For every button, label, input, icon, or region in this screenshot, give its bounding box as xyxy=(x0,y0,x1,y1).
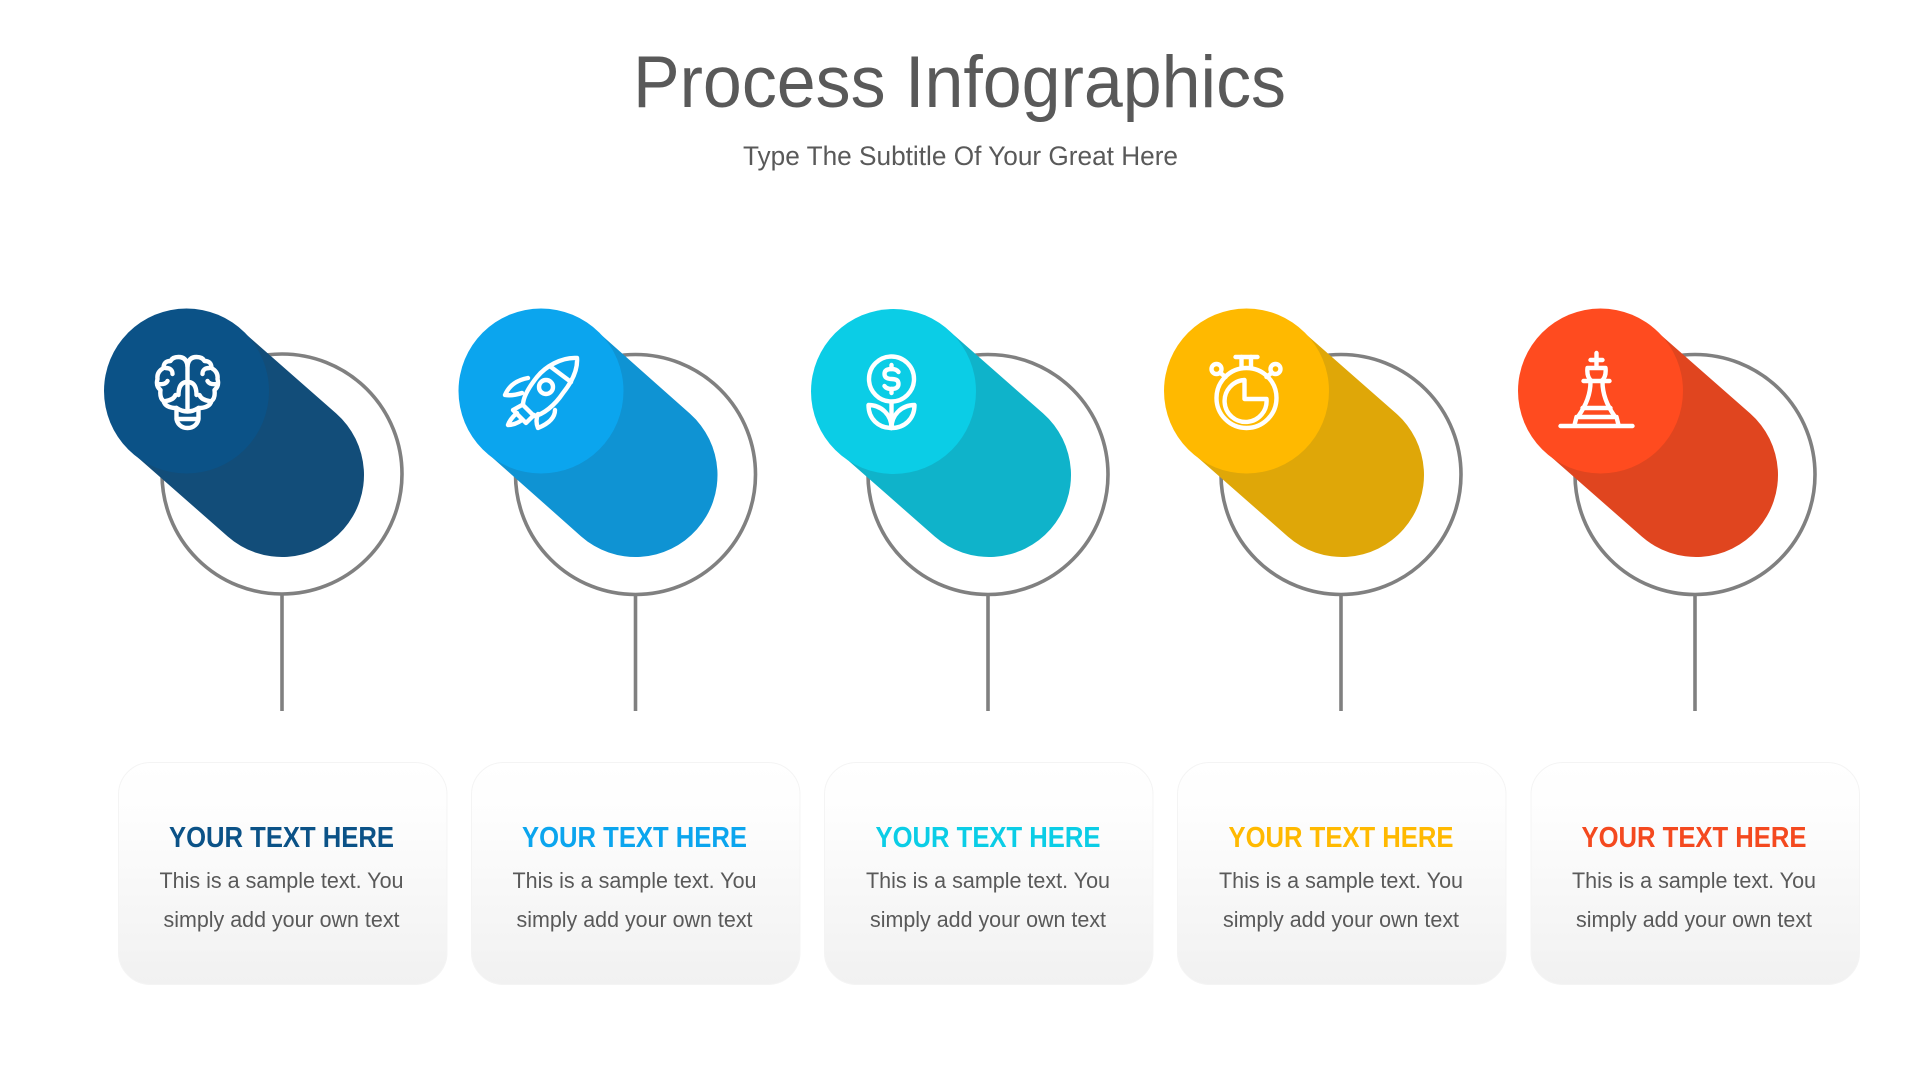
step 4: stopwatch xyxy=(1164,308,1461,711)
card 3 xyxy=(824,762,1153,984)
card 3 text: simply add your own text xyxy=(870,907,1106,932)
card 4 text: This is a sample text. You xyxy=(1219,868,1463,893)
title: Process Infographics xyxy=(633,42,1286,123)
card 1 text: This is a sample text. You xyxy=(160,868,404,893)
card 1 text: simply add your own text xyxy=(164,907,400,932)
icon: money flower xyxy=(868,356,914,428)
front circle 4 xyxy=(1164,308,1329,474)
card 2 heading: YOUR TEXT HERE xyxy=(522,822,747,854)
step 5: chess king xyxy=(1518,308,1815,711)
capsule 1 xyxy=(188,392,282,475)
step 2: rocket xyxy=(458,308,756,711)
card 4 text: simply add your own text xyxy=(1223,907,1459,932)
card 3 heading: YOUR TEXT HERE xyxy=(876,822,1100,854)
step 1: brain xyxy=(104,308,402,711)
ring and stem 1 xyxy=(162,354,402,711)
card 2 xyxy=(472,762,800,984)
capsule 4 xyxy=(1248,392,1342,475)
front circle 1 xyxy=(104,308,269,474)
subtitle: Type The Subtitle Of Your Great Here xyxy=(743,141,1178,171)
icon: rocket xyxy=(505,358,577,428)
capsule 5 xyxy=(1602,392,1696,475)
capsule 2 xyxy=(542,392,636,475)
card 2 text: This is a sample text. You xyxy=(512,868,756,893)
card 1 heading: YOUR TEXT HERE xyxy=(169,822,394,854)
card 4 xyxy=(1178,762,1506,984)
ring and stem 3 xyxy=(868,354,1108,711)
front circle 5 xyxy=(1518,308,1683,474)
step 3: money flower xyxy=(811,309,1108,711)
icon: stopwatch xyxy=(1212,357,1280,428)
icon: chess king xyxy=(1560,353,1632,426)
capsule 3 xyxy=(894,392,989,475)
card 1 xyxy=(118,762,447,984)
ring and stem 4 xyxy=(1221,354,1461,711)
card 5 xyxy=(1531,762,1860,984)
front circle 3 xyxy=(811,309,976,474)
card 5 text: simply add your own text xyxy=(1576,907,1812,932)
card 5 heading: YOUR TEXT HERE xyxy=(1582,822,1806,854)
card 3 text: This is a sample text. You xyxy=(866,868,1110,893)
ring and stem 5 xyxy=(1575,354,1815,711)
card 2 text: simply add your own text xyxy=(516,907,752,932)
icon: brain bulb xyxy=(157,357,218,428)
ring and stem 2 xyxy=(516,354,756,711)
front circle 2 xyxy=(458,308,624,474)
card 5 text: This is a sample text. You xyxy=(1572,868,1816,893)
card 4 heading: YOUR TEXT HERE xyxy=(1228,822,1454,854)
